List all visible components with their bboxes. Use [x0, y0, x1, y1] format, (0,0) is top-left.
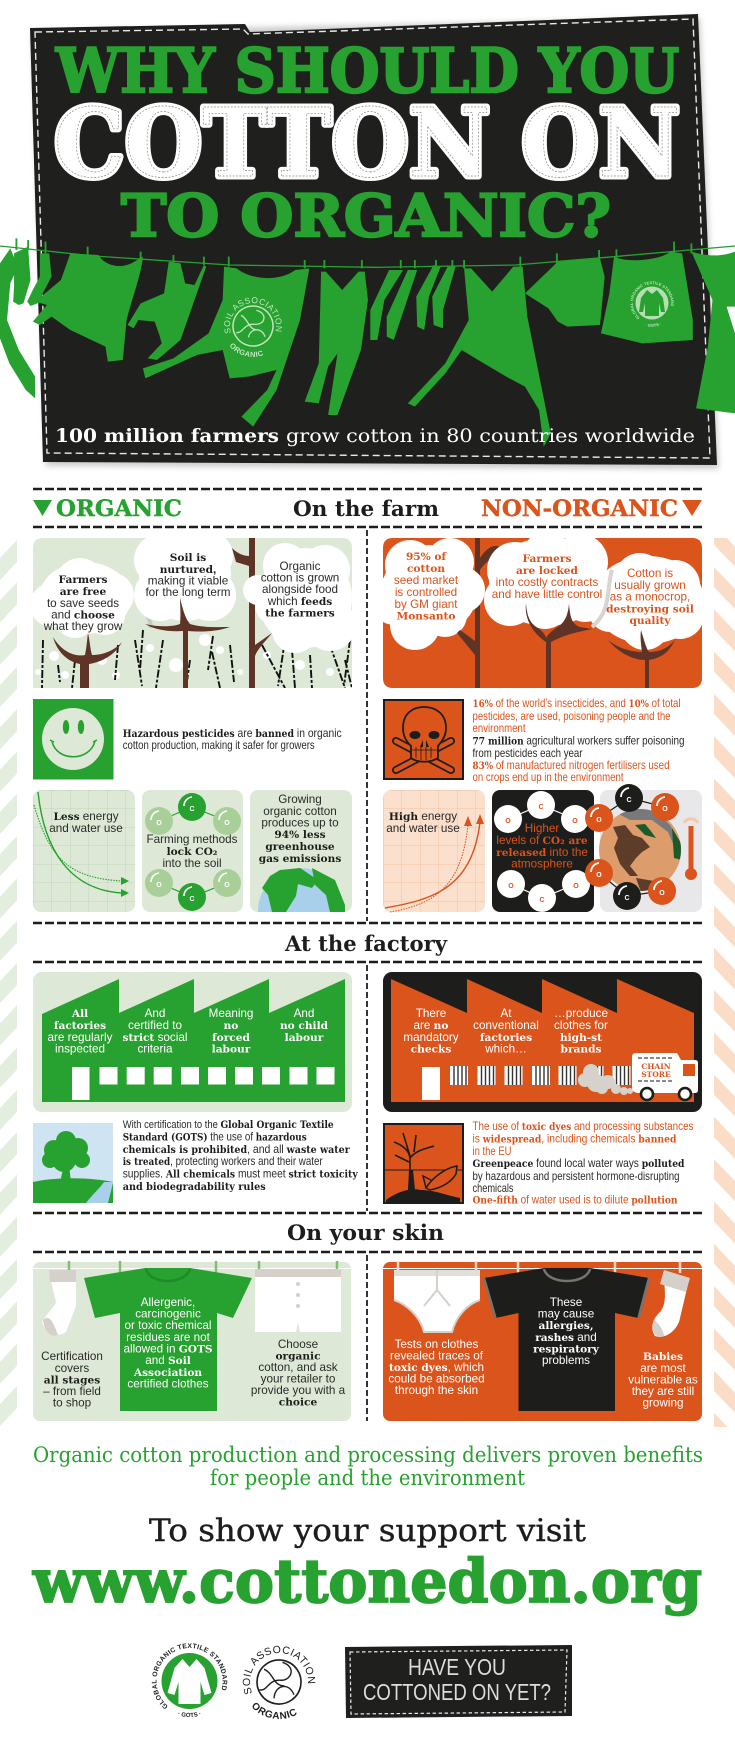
text: no forced labour: Meaning — [209, 1007, 253, 1020]
text: strict social criteria: strict social — [123, 1031, 187, 1044]
panel: organic skin — [33, 1261, 351, 1421]
text: tests on clothes — [388, 1338, 485, 1397]
text: GOTS certification: Standard (GOTS) the use of hazardous — [123, 1130, 307, 1144]
molecule bottom: O — [224, 882, 230, 889]
text: allergenic residues: certified clothes — [127, 1378, 209, 1390]
panel: warming globe — [585, 784, 702, 912]
garment: long dress — [408, 267, 551, 447]
heading: organic: ORGANIC — [56, 496, 182, 522]
garment: long trousers — [305, 272, 368, 415]
text: toxic dyes facts: in the EU — [472, 1145, 512, 1158]
door and windows — [72, 1067, 334, 1100]
cotton plant branches — [53, 598, 272, 688]
text: no forced labour — [209, 1007, 253, 1056]
text: farmers are locked: Farmers — [523, 553, 571, 565]
label: have you cottoned on yet: HAVE YOU — [408, 1654, 506, 1680]
text: GOTS certification — [123, 1119, 358, 1193]
icon: globe — [258, 868, 345, 912]
panel: higher CO2 levels: C — [538, 804, 544, 811]
exhaust smoke — [578, 1064, 633, 1095]
panel: lock CO2: Farming methods — [147, 833, 238, 846]
text: GOTS certification: With certification to the Global Organic Textile — [123, 1119, 334, 1131]
website url: www.cottonedon.org — [32, 1547, 702, 1617]
text: certification — [41, 1350, 103, 1410]
text: farmers are free: and choose — [51, 608, 115, 622]
text: farmers are free: what they grow — [43, 620, 123, 633]
text: pesticide facts: from pesticides each year — [472, 747, 583, 760]
text: choose organic: your retailer to — [261, 1372, 336, 1386]
icon: globe — [599, 806, 682, 895]
text: high-st brands: …produce — [554, 1007, 608, 1020]
branches — [457, 603, 675, 688]
text: organic cotton grown with food: alongside food — [262, 583, 338, 596]
text: pesticide facts: pesticides, are used, poisoning people and the — [472, 710, 670, 723]
text: farmers are locked: are locked — [516, 565, 579, 577]
text: farmers are locked: and have little control — [492, 588, 602, 601]
molecule top: C — [189, 806, 195, 813]
panel: less energy chart — [33, 790, 135, 912]
molecules: C — [626, 797, 632, 804]
trunk, tall — [475, 538, 502, 688]
conclusion text: Organic cotton production and processing delivers proven benefits — [33, 1443, 703, 1467]
text: soil is nurtured: Soil is — [170, 552, 206, 564]
text: pesticide facts: on crops end up in the environment — [472, 771, 624, 784]
text: conventional factories — [473, 1007, 539, 1056]
tree trunk, tall — [232, 536, 255, 688]
text: organic cotton grown with food: Organic — [280, 560, 321, 573]
heading: on the farm: On the farm — [293, 496, 439, 521]
panel: greenhouse gas: organic cotton — [263, 805, 337, 818]
text: organic cotton grown with food: which feeds — [267, 595, 332, 608]
hero: black fabric label — [30, 14, 719, 469]
text: certification: to shop — [53, 1396, 92, 1410]
molecule bottom — [145, 869, 241, 911]
text: conventional factories: factories — [480, 1032, 532, 1044]
text: no forced labour: forced — [212, 1032, 250, 1044]
text: monocrop: as a monocrop, — [610, 590, 690, 604]
text: conventional factories: which… — [484, 1042, 527, 1056]
molecule top: O — [156, 820, 162, 827]
hero logo: soil association: SOIL ASSOCIATION — [224, 297, 282, 334]
text: organic cotton grown with food: cotton is grown — [261, 572, 339, 584]
text: strict social criteria: And — [145, 1007, 165, 1020]
logo: GOTS: · GOTS · — [178, 1712, 200, 1717]
hero logo: GOTS: GLOBAL ORGANIC TEXTILE STANDARD — [630, 281, 674, 320]
panel: certified factory — [33, 972, 352, 1112]
panel: non-organic farm — [370, 531, 704, 688]
icon: white sock — [42, 1270, 76, 1336]
logo: soil association: SOIL ASSOCIATION — [242, 1646, 316, 1694]
text: monocrop: destroying soil — [606, 604, 694, 616]
logo: soil association — [242, 1646, 316, 1720]
text: certification: – from field — [43, 1385, 101, 1398]
logo: soil association: ORGANIC — [252, 1702, 296, 1720]
text: allergenic residues — [123, 1296, 213, 1390]
heading: on your skin: On your skin — [287, 1220, 444, 1245]
text: tests on clothes: toxic dyes, which — [389, 1361, 484, 1374]
text: GOTS certification: is treated, protecting workers and their water — [123, 1155, 323, 1168]
icon: black t-shirt — [484, 1268, 649, 1411]
text: certification: Certification — [41, 1350, 103, 1363]
title: to organic: TO ORGANIC? — [121, 182, 611, 250]
heading: non-organic: NON-ORGANIC — [481, 496, 678, 522]
text: may cause allergies: respiratory — [533, 1344, 600, 1356]
text: pesticide facts: 16% of the world’s insecticides, and 10% of total — [472, 697, 680, 710]
hero statistic: 100 million farmers — [55, 426, 279, 447]
panel: non-organic skin — [383, 1261, 702, 1421]
text: farmers are free: Farmers — [59, 574, 107, 586]
text: 95% of cotton: cotton — [407, 563, 445, 575]
text: 95% of cotton: by GM giant — [394, 598, 458, 611]
text: farmers are locked: into costly contracts — [496, 576, 598, 589]
text: farmers are free — [43, 574, 123, 633]
heading: at the factory: At the factory — [284, 931, 448, 956]
text: tests on clothes: revealed traces of — [390, 1350, 484, 1362]
text: may cause allergies: These — [550, 1296, 582, 1309]
garment: top — [128, 262, 206, 360]
text: 95% of cotton: 95% of — [406, 551, 448, 563]
molecule top: O — [224, 820, 230, 827]
panel: high energy chart: High energy — [389, 810, 457, 823]
cotton clouds — [383, 538, 702, 650]
panel: higher CO2 levels: C — [539, 897, 545, 904]
text: certification: covers — [55, 1362, 89, 1375]
text: high-st brands: high-st — [560, 1032, 602, 1044]
text: allergenic residues: Allergenic, — [141, 1296, 195, 1309]
garment: far left strip and socks — [0, 248, 35, 398]
panel: greenhouse gas: 94% less — [274, 829, 326, 841]
text: GOTS certification: supplies. All chemicals must meet strict toxicity — [123, 1168, 358, 1180]
label: have you cottoned on yet: COTTONED ON YET? — [363, 1679, 551, 1705]
text: allergenic residues: and Soil — [145, 1354, 191, 1367]
text: may cause allergies: may cause — [538, 1308, 594, 1320]
text: monocrop: usually grown — [614, 579, 686, 592]
barred windows — [450, 1066, 630, 1085]
icon: green t-shirt — [84, 1268, 252, 1411]
panel: higher CO2 levels — [492, 790, 594, 912]
icon: white shorts — [255, 1269, 341, 1332]
molecules: O — [659, 890, 665, 897]
hero logo: GOTS: · GOTS · — [646, 323, 660, 327]
panel: lock CO2 — [142, 790, 243, 912]
grey branch — [133, 590, 151, 628]
text: no mandatory checks: checks — [411, 1044, 451, 1056]
text: monocrop: quality — [629, 615, 671, 627]
text: high-st brands: brands — [561, 1044, 601, 1056]
text: high-st brands: clothes for — [554, 1019, 608, 1032]
panel: higher CO2 levels: O — [572, 818, 578, 825]
title: cotton on: COTTON ON — [54, 88, 680, 199]
hero statistic — [55, 426, 695, 447]
text: strict social criteria: certified to — [128, 1019, 182, 1032]
text: 95% of cotton: is controlled — [395, 586, 457, 599]
text: pesticide facts — [472, 697, 684, 784]
icon: chain store truck: STORE — [641, 1070, 671, 1079]
panel: high energy chart — [383, 790, 485, 912]
molecules: O — [662, 806, 668, 813]
hero logo: soil association — [224, 297, 282, 357]
panel: organic farm — [33, 538, 352, 688]
text: no mandatory checks: are no — [414, 1019, 448, 1032]
text: farmers are free: to save seeds — [47, 597, 119, 610]
text: factories inspected: are regularly — [48, 1031, 113, 1044]
panel: higher CO2 levels: released into the — [496, 846, 588, 859]
text: allergenic residues: allowed in GOTS — [123, 1342, 213, 1356]
text: allergenic residues: or toxic chemical — [124, 1319, 212, 1332]
text: toxic dyes facts: chemicals — [472, 1182, 514, 1195]
text: choose organic: organic — [275, 1350, 321, 1362]
panel: higher CO2 levels: levels of CO₂ are — [496, 834, 588, 847]
label: have you cottoned on yet — [345, 1645, 572, 1718]
text: allergenic residues: residues are not — [126, 1331, 211, 1344]
field of grass and cotton — [33, 538, 352, 688]
garment: shirt — [525, 258, 605, 327]
conclusion text — [33, 1443, 703, 1490]
conclusion text: for people and the environment — [210, 1466, 526, 1490]
icon: tree — [33, 1123, 113, 1203]
panel: greenhouse gas: Growing — [278, 793, 322, 806]
text: pesticide facts: 83% of manufactured nitrogen fertilisers used — [472, 759, 670, 772]
panel: lock CO2: lock CO₂ — [167, 846, 218, 858]
text: factories inspected: factories — [54, 1020, 106, 1032]
panel: greenhouse gas: gas emissions — [259, 853, 341, 865]
icon: smiley — [33, 699, 114, 780]
text: choose organic: provide you with a — [251, 1384, 346, 1397]
panel: greenhouse gas: produces up to — [261, 816, 339, 830]
clothesline with garments — [0, 238, 735, 447]
text: no child labour — [280, 1007, 329, 1044]
text: 95% of cotton: Monsanto — [396, 610, 456, 622]
cotton clouds — [33, 538, 352, 653]
text: soil is nurtured — [145, 552, 231, 599]
text: allergenic residues: Association — [133, 1367, 202, 1379]
hero statistic: grow cotton in 80 countries worldwide — [286, 426, 695, 447]
text: soil is nurtured: for the long term — [145, 586, 231, 599]
text: organic cotton grown with food — [261, 560, 339, 620]
text: factories inspected: All — [71, 1008, 88, 1020]
molecule bottom: C — [189, 896, 195, 903]
panel: greenhouse gas: greenhouse — [265, 841, 335, 853]
text: no mandatory checks — [403, 1007, 459, 1056]
pegs — [69, 1261, 337, 1273]
text: hazardous pesticides banned: Hazardous pesticides are banned in organic — [123, 727, 342, 740]
title: cotton on: COTTON ON — [54, 88, 680, 199]
text: choose organic: cotton, and ask — [258, 1361, 338, 1374]
text: choose organic: choice — [279, 1396, 317, 1408]
text: strict social criteria — [123, 1007, 187, 1056]
text: tests on clothes: Tests on clothes — [395, 1338, 479, 1351]
side stripes — [0, 538, 735, 1427]
text: no forced labour: labour — [212, 1044, 251, 1056]
text: toxic dyes facts: One-fifth of water used is to dilute pollution — [472, 1194, 678, 1206]
hero logo: soil association: ORGANIC — [230, 344, 263, 357]
text: factories inspected: inspected — [55, 1042, 105, 1056]
title: why should you: WHY SHOULD YOU — [55, 36, 679, 107]
text: 95% of cotton — [394, 551, 459, 622]
panel: high energy chart: and water use — [386, 822, 460, 835]
icon: white baby sock — [652, 1270, 690, 1337]
panel: higher CO2 levels: Higher — [525, 822, 559, 835]
panel: greenhouse gas — [250, 790, 352, 912]
panel: lock CO2: into the soil — [162, 857, 222, 870]
text: no mandatory checks: mandatory — [403, 1031, 459, 1044]
call to action: To show your support visit — [149, 1513, 587, 1549]
text: farmers are locked — [492, 553, 602, 601]
garment: large vest — [143, 267, 309, 427]
text: conventional factories: At — [500, 1007, 512, 1020]
panel: less energy chart: and water use — [49, 822, 123, 835]
text: babies vulnerable — [628, 1351, 698, 1410]
text: farmers are free: are free — [60, 586, 107, 598]
garment: socks — [370, 270, 403, 340]
text: no forced labour: no — [224, 1020, 238, 1032]
panel: higher CO2 levels: atmosphere — [511, 858, 573, 870]
panel: higher CO2 levels: O — [505, 818, 511, 825]
icon: thermometer — [684, 819, 698, 880]
molecules: C — [624, 895, 630, 902]
icon: white briefs — [394, 1270, 480, 1332]
text: monocrop: Cotton is — [627, 567, 673, 580]
text: GOTS certification: chemicals is prohibited, and all waste water — [123, 1143, 350, 1156]
panel: higher CO2 levels: O — [573, 883, 579, 890]
text: pesticide facts: environment — [472, 722, 526, 735]
text: hazardous pesticides banned: cotton production, making it safer for growers — [123, 739, 315, 752]
molecule bottom: O — [156, 882, 162, 889]
icon: environmental hazard — [384, 1124, 463, 1203]
text: no mandatory checks: There — [416, 1007, 446, 1020]
panel: conventional factory — [383, 972, 702, 1112]
text: no child labour: And — [294, 1007, 314, 1020]
text: toxic dyes facts — [472, 1120, 694, 1206]
text: organic cotton grown with food: the farmers — [265, 608, 335, 620]
text: conventional factories: conventional — [473, 1019, 539, 1032]
garment: GOTS shirt — [601, 252, 693, 343]
text: babies vulnerable: growing — [643, 1396, 683, 1410]
panel: less energy chart: Less energy — [53, 810, 119, 823]
text: soil is nurtured: nurtured, — [160, 563, 216, 576]
text: tests on clothes: could be absorbed — [388, 1372, 485, 1386]
text: pesticide facts: 77 million agricultural workers suffer poisoning — [472, 734, 684, 748]
text: babies vulnerable: are most — [640, 1362, 686, 1375]
text: allergenic residues: carcinogenic — [135, 1308, 201, 1320]
garment: vest — [33, 253, 143, 362]
text: certification: all stages — [44, 1374, 100, 1386]
panel: higher CO2 levels: O — [508, 883, 514, 890]
text: babies vulnerable: they are still — [632, 1385, 694, 1398]
text: may cause allergies — [533, 1296, 600, 1367]
icon: chain store truck: CHAIN — [641, 1062, 671, 1071]
text: may cause allergies: rashes and — [535, 1331, 597, 1344]
garment: right edge — [691, 252, 735, 413]
icon: skull hazard — [384, 700, 463, 779]
text: no child labour: no child — [280, 1020, 329, 1032]
text: toxic dyes facts: is widespread, including chemicals banned — [472, 1132, 677, 1146]
text: no child labour: labour — [285, 1032, 324, 1044]
text: babies vulnerable: Babies — [643, 1351, 683, 1363]
text: toxic dyes facts: The use of toxic dyes and processing substances — [472, 1120, 694, 1133]
text: babies vulnerable: vulnerable as — [628, 1374, 698, 1386]
molecules: O — [596, 872, 602, 879]
text: 95% of cotton: seed market — [394, 574, 459, 587]
text: toxic dyes facts: by hazardous and persistent hormone-disrupting — [472, 1170, 680, 1183]
text: choose organic: Choose — [278, 1338, 318, 1351]
text: choose organic — [251, 1338, 346, 1408]
text: GOTS certification: and biodegradability rules — [123, 1181, 266, 1193]
text: high-st brands — [554, 1007, 608, 1056]
logo: GOTS: GLOBAL ORGANIC TEXTILE STANDARD — [152, 1643, 228, 1709]
text: tests on clothes: through the skin — [395, 1384, 478, 1397]
text: soil is nurtured: making it viable — [148, 574, 228, 588]
text: factories inspected — [48, 1008, 113, 1056]
text: may cause allergies: allergies, — [538, 1320, 594, 1332]
icon: chain store truck — [632, 1053, 698, 1100]
text: monocrop — [606, 567, 694, 627]
section rules — [33, 489, 702, 1421]
molecules — [585, 784, 679, 910]
molecules: O — [596, 817, 602, 824]
text: strict social criteria: criteria — [137, 1042, 173, 1056]
text: toxic dyes facts: Greenpeace found local water ways polluted — [472, 1157, 685, 1170]
text: hazardous pesticides banned — [123, 727, 342, 752]
text: may cause allergies: problems — [542, 1354, 590, 1367]
molecule top — [145, 793, 241, 835]
